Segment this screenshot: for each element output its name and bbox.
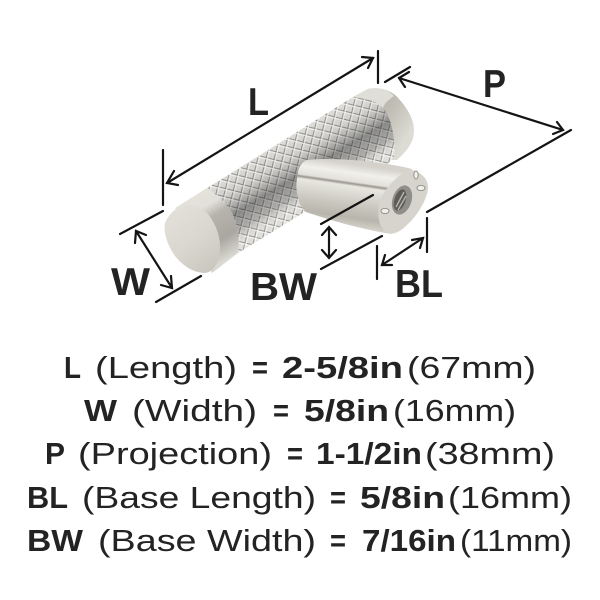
- spec row: width: =: [273, 393, 289, 428]
- spec row: projection: (Projection): [78, 436, 272, 471]
- spec row: base length: [27, 480, 572, 515]
- spec row: length: =: [252, 350, 268, 385]
- spec row: base width: (Base Width): [98, 523, 316, 558]
- label P: P: [483, 63, 506, 106]
- spec row: base length: 5/8in: [360, 480, 445, 515]
- label BL: BL: [395, 263, 443, 306]
- end face: [165, 205, 220, 273]
- dimension BL arrow: [377, 218, 427, 279]
- spec row: projection: =: [287, 436, 303, 471]
- stem end face: [378, 170, 428, 234]
- spec row: length: [64, 350, 536, 385]
- spec row: base length: (Base Length): [82, 480, 316, 515]
- dimension L arrow: [163, 51, 378, 205]
- near end cap band: [175, 188, 239, 273]
- spec row: length: (67mm): [407, 350, 536, 385]
- spec row: base length: (16mm): [448, 480, 572, 515]
- knurled grip: [207, 97, 395, 253]
- spec row: width: W: [84, 393, 118, 428]
- spec row: width: (16mm): [393, 393, 516, 428]
- far end cap: [353, 88, 414, 160]
- spec row: length: 2-5/8in: [282, 350, 403, 385]
- spec row: width: (Width): [132, 393, 257, 428]
- dimension P arrow: [385, 67, 571, 212]
- knob illustration: [165, 88, 428, 273]
- far cap top rim: [353, 88, 394, 108]
- spec row: projection: [45, 436, 555, 471]
- spec row: base length: =: [330, 480, 346, 515]
- dimension W arrow: [120, 211, 201, 302]
- spec row: projection: P: [45, 436, 65, 471]
- spec row: base width: 7/16in: [362, 523, 456, 558]
- spec row: base width: (11mm): [460, 523, 572, 558]
- spec row: base width: [27, 523, 572, 558]
- spec row: base width: =: [330, 523, 346, 558]
- spec row: width: 5/8in: [304, 393, 389, 428]
- label W: W: [111, 261, 150, 304]
- label L: L: [248, 81, 269, 124]
- label BW: BW: [250, 266, 317, 309]
- spec row: length: L: [64, 350, 81, 385]
- spec row: base length: BL: [27, 480, 68, 515]
- threaded hole: [388, 183, 416, 217]
- spec row: projection: 1-1/2in: [316, 436, 422, 471]
- spec row: width: [84, 393, 516, 428]
- screw notches: [381, 171, 425, 214]
- spec row: length: (Length): [95, 350, 237, 385]
- dimension BW arrow: [321, 195, 382, 269]
- stem: [296, 159, 428, 234]
- spec row: base width: BW: [27, 523, 84, 558]
- spec row: projection: (38mm): [425, 436, 555, 471]
